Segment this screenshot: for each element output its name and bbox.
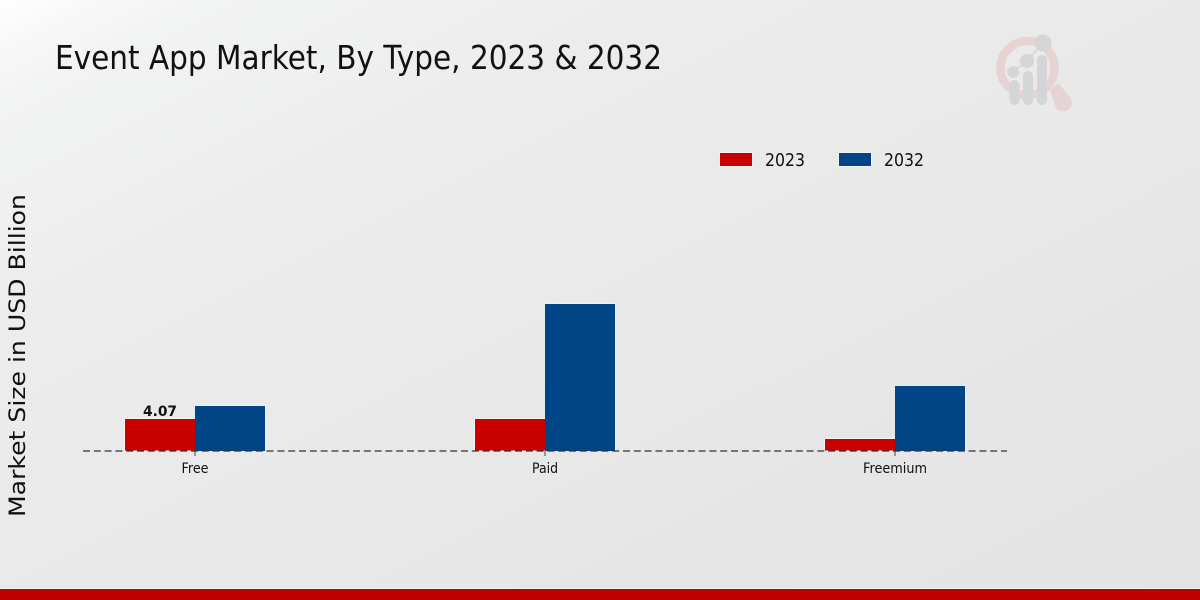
group: Freemium [824, 386, 966, 477]
group: Free [124, 404, 266, 477]
value label: 4.07: 4.07 [143, 404, 177, 420]
legend item: 2023: 2023 [765, 150, 805, 171]
group: Free: Free [182, 461, 208, 477]
bar chart [83, 304, 1007, 477]
title: Event App Market, By Type, 2023 & 2032 [55, 38, 662, 77]
y axis label: Market Size in USD Billion [6, 194, 31, 517]
group: Freemium: Freemium [863, 461, 927, 477]
legend item: 2032 [838, 150, 924, 171]
legend item: 2023 [720, 150, 805, 171]
group: Paid [474, 304, 616, 477]
group: Paid: Paid [532, 461, 558, 477]
icon: watermark logo [1000, 34, 1072, 111]
legend [720, 150, 924, 171]
footer bar [0, 588, 1200, 600]
legend item: 2032: 2032 [884, 150, 924, 171]
